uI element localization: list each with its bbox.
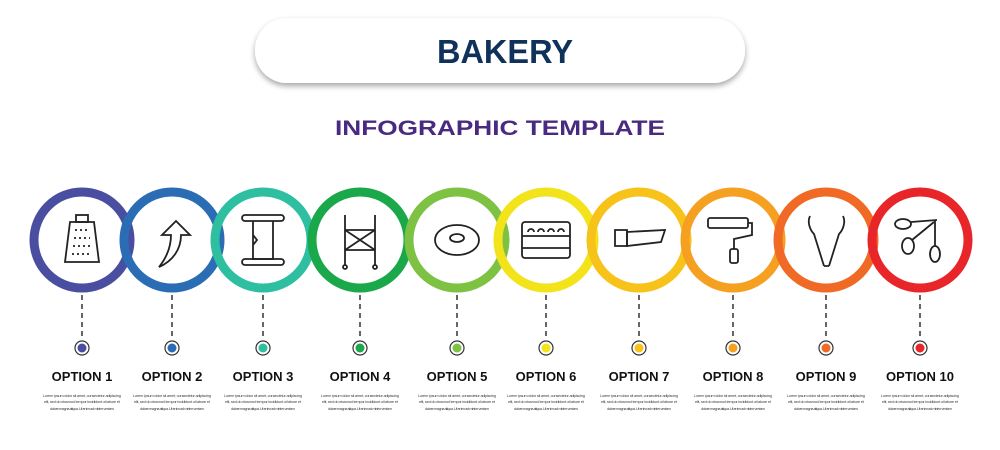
option 9 — [778, 192, 874, 411]
option 7 — [591, 192, 687, 411]
option 4: elit, sed do eiusmod tempor incididunt ut labore et — [322, 399, 399, 404]
option 4: OPTION 4 — [330, 369, 391, 384]
option 5: elit, sed do eiusmod tempor incididunt ut labore et — [419, 399, 496, 404]
option 8: dolore magna aliqua. Ut enim ad minim veniam — [701, 406, 766, 411]
option 9: OPTION 9 — [796, 369, 856, 384]
option 7: dolore magna aliqua. Ut enim ad minim veniam — [607, 406, 672, 411]
icon: saw — [615, 230, 665, 246]
title: BAKERY — [437, 33, 573, 70]
option 7: elit, sed do eiusmod tempor incididunt ut labore et — [601, 399, 678, 404]
option 9: dolore magna aliqua. Ut enim ad minim veniam — [794, 406, 859, 411]
option 6: OPTION 6 — [516, 369, 576, 384]
option 3: Lorem ipsum dolor sit amet, consectetur adipiscing — [224, 393, 302, 398]
option 5: dolore magna aliqua. Ut enim ad minim veniam — [425, 406, 490, 411]
option 4 — [312, 192, 408, 411]
icon: arrow — [159, 221, 190, 267]
option 10 — [872, 192, 968, 411]
icon: scroll — [242, 215, 284, 265]
option 6 — [498, 192, 594, 411]
option 5 — [409, 192, 505, 411]
option 1 — [34, 192, 130, 411]
option 2: dolore magna aliqua. Ut enim ad minim veniam — [140, 406, 205, 411]
option 2: OPTION 2 — [142, 369, 202, 384]
option 10: OPTION 10 — [886, 369, 954, 384]
icon: bakery display — [522, 222, 570, 258]
option 4: Lorem ipsum dolor sit amet, consectetur adipiscing — [321, 393, 399, 398]
option 7: OPTION 7 — [609, 369, 669, 384]
subtitle: INFOGRAPHIC TEMPLATE — [335, 117, 665, 140]
option 3: elit, sed do eiusmod tempor incididunt ut labore et — [225, 399, 302, 404]
icon: paint roller — [708, 218, 752, 263]
option 9: elit, sed do eiusmod tempor incididunt ut labore et — [788, 399, 865, 404]
option 6: dolore magna aliqua. Ut enim ad minim veniam — [514, 406, 579, 411]
option 1: dolore magna aliqua. Ut enim ad minim veniam — [50, 406, 115, 411]
option 6: elit, sed do eiusmod tempor incididunt ut labore et — [508, 399, 585, 404]
option 7: Lorem ipsum dolor sit amet, consectetur adipiscing — [600, 393, 678, 398]
option 3: OPTION 3 — [233, 369, 293, 384]
option 8: Lorem ipsum dolor sit amet, consectetur adipiscing — [694, 393, 772, 398]
option 10: dolore magna aliqua. Ut enim ad minim veniam — [888, 406, 953, 411]
option 8: OPTION 8 — [703, 369, 763, 384]
option 1: elit, sed do eiusmod tempor incididunt ut labore et — [44, 399, 121, 404]
option 1: OPTION 1 — [52, 369, 112, 384]
option 8 — [685, 192, 781, 411]
option 6: Lorem ipsum dolor sit amet, consectetur adipiscing — [507, 393, 585, 398]
option 1: Lorem ipsum dolor sit amet, consectetur adipiscing — [43, 393, 121, 398]
icon: donut — [435, 225, 479, 255]
option 2: elit, sed do eiusmod tempor incididunt ut labore et — [134, 399, 211, 404]
option 5: OPTION 5 — [427, 369, 487, 384]
option 5: Lorem ipsum dolor sit amet, consectetur adipiscing — [418, 393, 496, 398]
option 2 — [124, 192, 220, 411]
option 3 — [215, 192, 311, 411]
option 2: Lorem ipsum dolor sit amet, consectetur adipiscing — [133, 393, 211, 398]
option 9: Lorem ipsum dolor sit amet, consectetur adipiscing — [787, 393, 865, 398]
title pill — [255, 18, 745, 83]
option 8: elit, sed do eiusmod tempor incididunt ut labore et — [695, 399, 772, 404]
icon: measuring spoons — [895, 219, 940, 262]
option 3: dolore magna aliqua. Ut enim ad minim veniam — [231, 406, 296, 411]
icon: tongs — [809, 216, 844, 266]
icon: scaffold — [343, 215, 377, 269]
option 10: Lorem ipsum dolor sit amet, consectetur adipiscing — [881, 393, 959, 398]
option 4: dolore magna aliqua. Ut enim ad minim veniam — [328, 406, 393, 411]
option 10: elit, sed do eiusmod tempor incididunt ut labore et — [882, 399, 959, 404]
icon: grater — [65, 215, 99, 262]
